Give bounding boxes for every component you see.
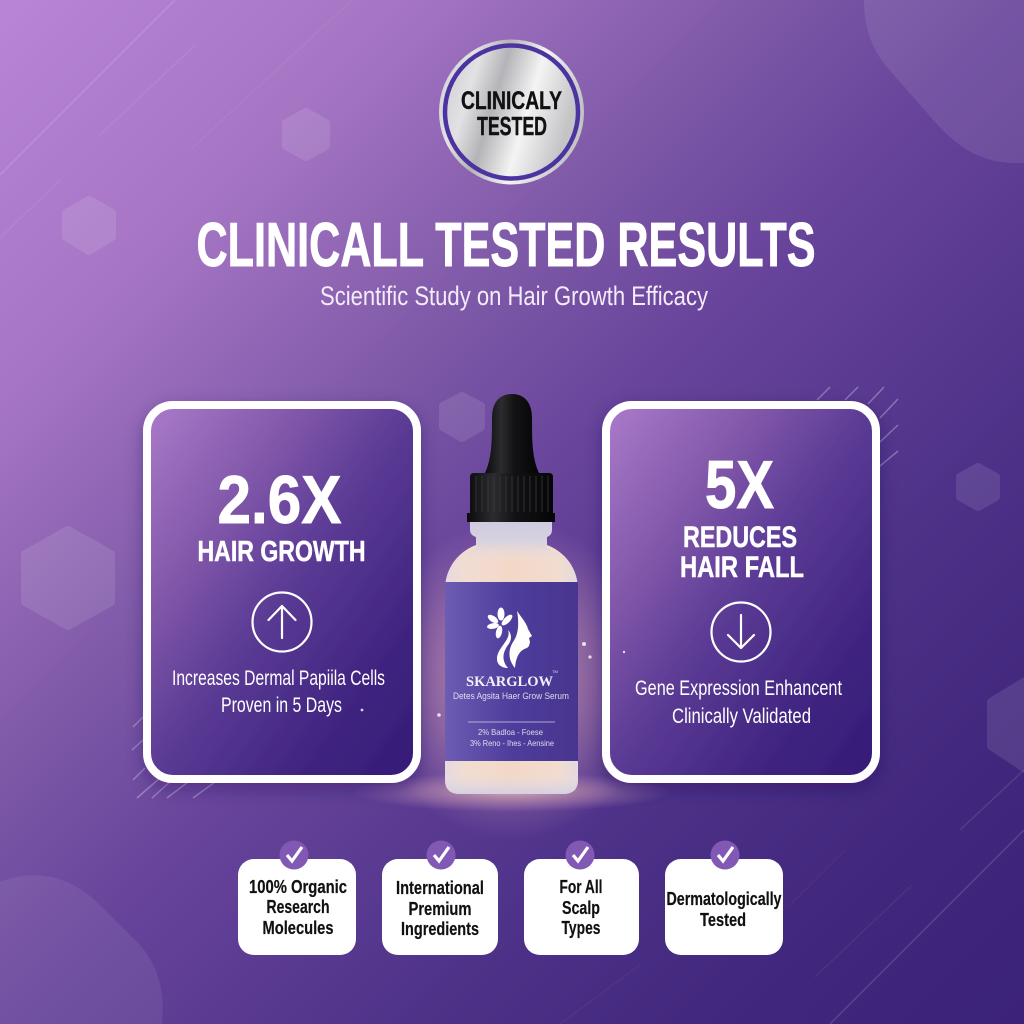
bottle brand text: 3% Reno - Ihes - Aensine (470, 738, 554, 748)
description: gene expression (635, 677, 842, 728)
bottle brand text (453, 669, 569, 748)
feature card: all scalp types (524, 840, 639, 955)
bottle glass body (445, 526, 578, 794)
label: Molecules (262, 917, 334, 938)
bottle label (445, 582, 578, 761)
feature card: premium ingredients (382, 840, 498, 955)
glow behind bottle (352, 520, 672, 840)
label (560, 876, 602, 938)
bottle logo: woman profile and flower (486, 608, 532, 668)
icon: down arrow (712, 602, 770, 662)
description: gene expression: Gene Expression Enhancent (635, 677, 842, 700)
panel: hair growth (147, 405, 417, 779)
heading: reduces hair fall: REDUCES (683, 521, 797, 554)
label: Dermatologically (666, 888, 782, 909)
decorative blob: top right (864, 0, 1024, 163)
bottle brand text: SKARGLOW (466, 674, 553, 690)
label: Types (562, 917, 600, 938)
label (249, 876, 347, 938)
description: hair growth: Increases Dermal Papiila Cells (172, 667, 385, 690)
check badge (710, 840, 740, 870)
label: Premium (408, 898, 472, 919)
decorative blob: bottom left (0, 875, 163, 1024)
badge: clinically tested seal (439, 40, 584, 184)
subtitle: Scientific Study on Hair Growth Efficacy (320, 281, 708, 311)
icon: up arrow (252, 592, 312, 652)
label: International (396, 877, 484, 898)
bottle brand text: Detes Agsita Haer Grow Serum (453, 691, 569, 701)
bottle brand text: 2% Badloa - Foese (478, 727, 543, 737)
label: Ingredients (401, 918, 479, 939)
check badge (566, 840, 594, 870)
feature card: dermatologically tested (665, 840, 783, 955)
heading: reduces hair fall (680, 521, 804, 584)
feature card: organic molecules (238, 840, 356, 955)
label: For All (560, 876, 602, 897)
heading: reduces hair fall: HAIR FALL (680, 551, 804, 584)
label: Scalp (562, 897, 600, 918)
panel: reduces hair fall (606, 405, 876, 779)
label (666, 888, 782, 930)
bottle base rim (445, 775, 578, 794)
sparkles (361, 642, 625, 717)
product bottle (445, 394, 578, 794)
description: gene expression: Clinically Validated (672, 705, 811, 728)
description: hair growth (172, 667, 385, 717)
heading: hair growth: HAIR GROWTH (198, 536, 366, 568)
label: 100% Organic (249, 876, 347, 897)
label: Tested (700, 909, 746, 930)
label: Research (266, 896, 330, 917)
check badge (426, 840, 456, 870)
bottle brand text: TM (552, 669, 558, 674)
description: hair growth: Proven in 5 Days (221, 694, 342, 717)
bottle cap (467, 473, 555, 522)
badge: clinically tested seal: CLINICALY (461, 87, 562, 115)
check badge (280, 840, 308, 870)
bottle dropper bulb (485, 394, 539, 473)
stat: 2.6X: 2.6X (218, 462, 342, 538)
bottle neck glass (457, 522, 566, 562)
label (396, 877, 484, 939)
badge: clinically tested seal: TESTED (477, 111, 547, 141)
stat: 5X: 5X (705, 447, 774, 523)
